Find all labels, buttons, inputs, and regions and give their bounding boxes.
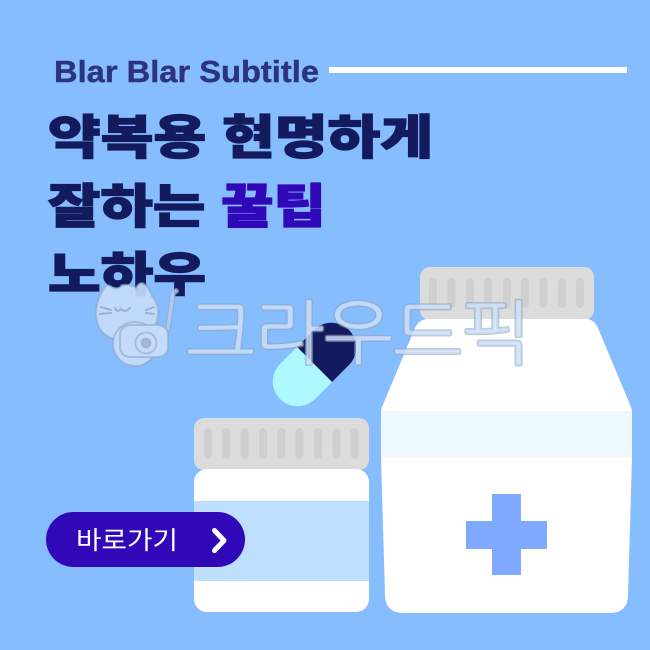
title	[48, 111, 433, 301]
bottle label band	[381, 411, 632, 457]
call to action button	[46, 512, 245, 567]
title: 노하우	[48, 248, 206, 301]
bottle body	[381, 319, 632, 613]
jar body	[194, 469, 369, 612]
subtitle: Blar Blar Subtitle	[54, 54, 319, 89]
watermark cat and camera logo	[96, 283, 176, 366]
large medicine bottle	[381, 267, 632, 613]
bottle cap	[420, 267, 594, 320]
icon: chevron	[214, 530, 224, 550]
title: 잘하는 꿀팁	[48, 180, 326, 233]
watermark	[96, 283, 531, 373]
title: 약복용 현명하게	[48, 111, 433, 164]
small medicine jar	[194, 418, 369, 612]
jar label	[194, 501, 369, 581]
button label: 바로가기	[76, 527, 178, 555]
header rule	[329, 67, 627, 73]
medical cross	[466, 494, 547, 575]
watermark wordmark: 크라우드픽	[186, 295, 531, 373]
capsule pill	[263, 313, 366, 416]
watermark wordmark: 크라우드픽	[186, 295, 531, 373]
jar cap	[194, 418, 369, 470]
